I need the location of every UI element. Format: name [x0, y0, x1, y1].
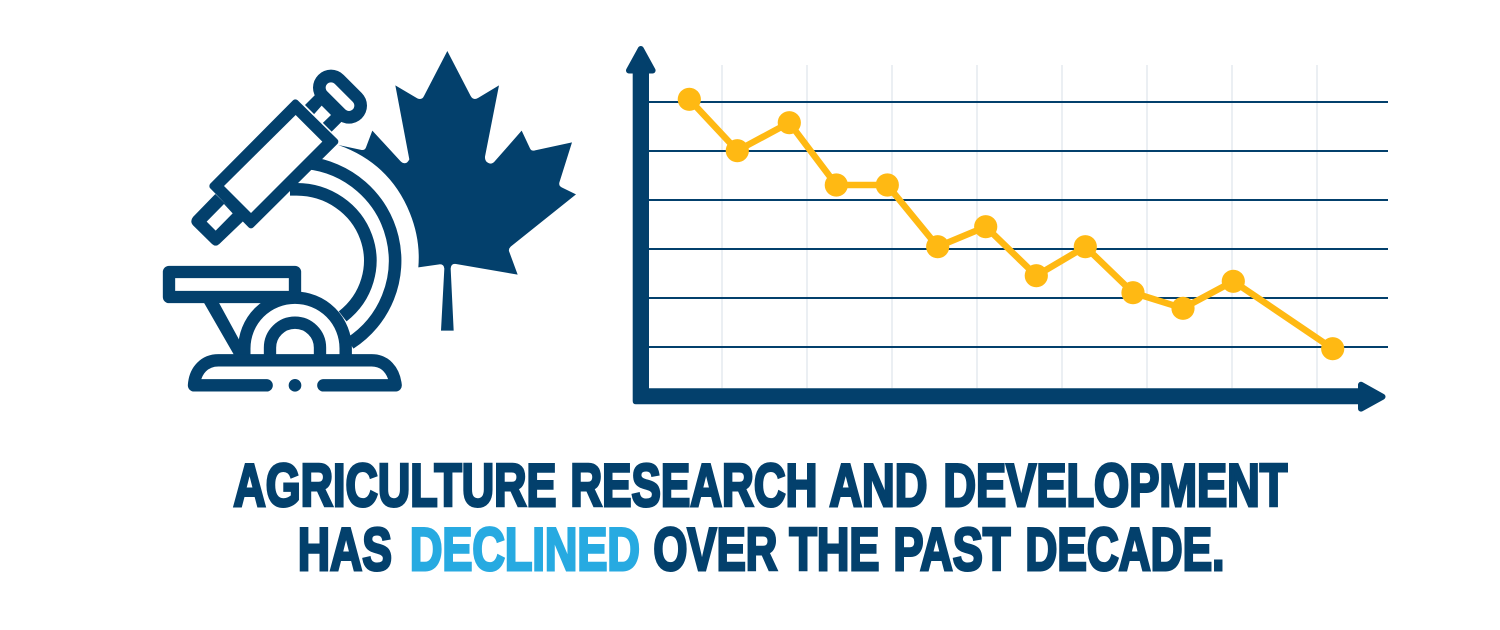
headline line 2: DECLINED	[410, 516, 640, 583]
objective	[191, 194, 243, 246]
vertical grid lines	[722, 65, 1317, 388]
headline line 1: DEVELOPMENT	[943, 452, 1287, 519]
headline	[233, 452, 1287, 583]
axes	[629, 49, 1382, 409]
headline line 2: PAST	[893, 516, 1010, 583]
headline line 1: AGRICULTURE	[233, 452, 556, 519]
icon: maple leaf	[338, 51, 576, 331]
declining data line	[678, 88, 1344, 360]
headline line 2: OVER	[653, 516, 777, 583]
horizontal grid lines	[645, 102, 1388, 347]
headline line 1: AND	[829, 452, 927, 519]
headline line 2: THE	[789, 516, 879, 583]
line chart	[629, 49, 1388, 409]
eyepiece	[331, 88, 349, 106]
tube	[213, 103, 335, 225]
headline line 1: RESEARCH	[570, 452, 817, 519]
headline line 2	[298, 516, 1224, 583]
headline line 1	[233, 452, 1287, 519]
headline line 2: DECADE.	[1025, 516, 1224, 583]
icon: microscope	[169, 88, 396, 392]
neck	[305, 95, 342, 132]
headline line 2: HAS	[298, 516, 392, 583]
